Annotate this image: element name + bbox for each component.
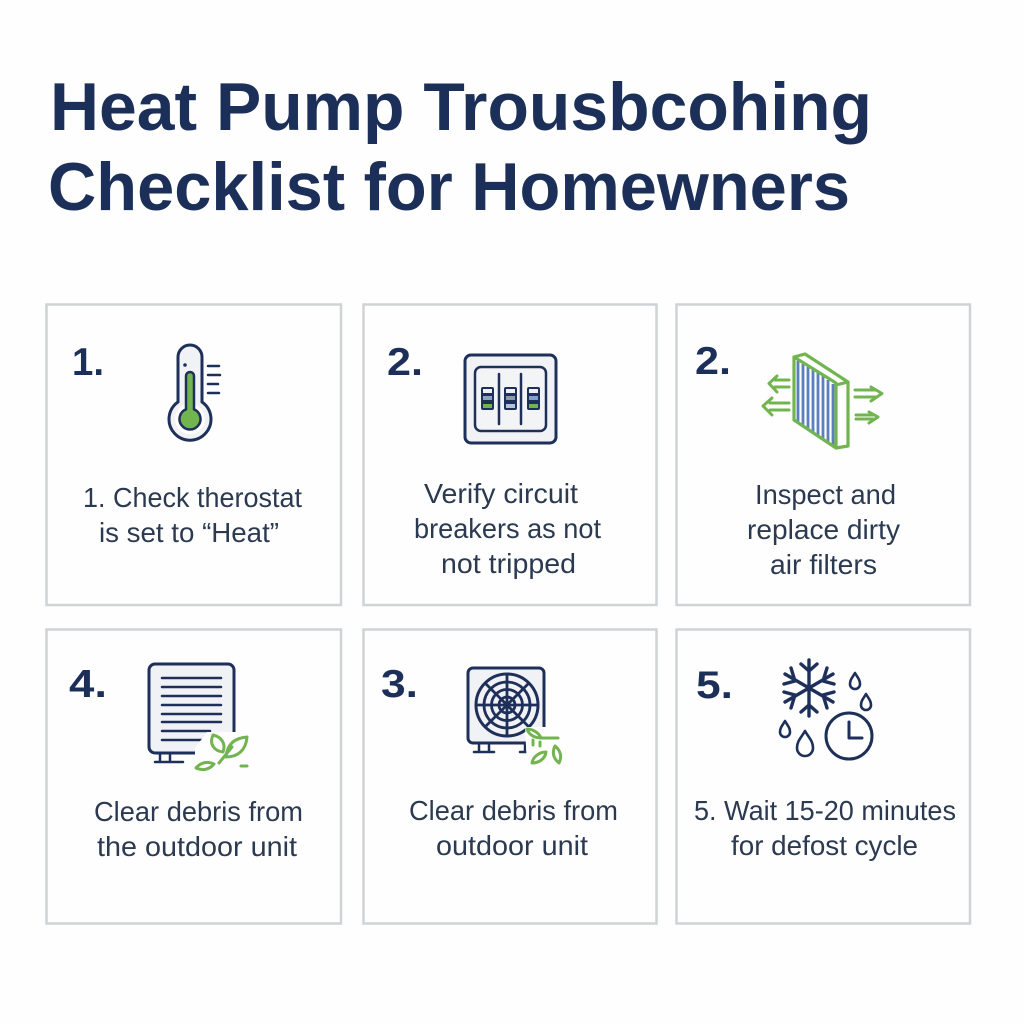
panel: defrost cycle [676,630,970,924]
step text [414,478,601,579]
icon: thermometer [169,345,220,440]
step text: 5. Wait 15-20 minutes [694,795,956,826]
title [48,69,872,225]
panel: air filters [676,304,970,605]
panel: check thermostat [46,304,341,605]
step text: for defost cycle [731,830,918,861]
step number 1: 1. [72,341,104,384]
icon: outdoor fan unit with leaves [468,668,563,765]
step text: air filters [770,549,877,580]
step text [83,482,302,548]
step text [94,796,303,862]
step number 2: 2. [695,340,731,383]
step text: is set to “Heat” [99,517,279,548]
step text: breakers as not [414,513,601,544]
step text [747,479,900,580]
step text: Clear debris from [94,796,303,827]
step number 2: 2. [387,341,423,384]
step text [694,795,956,861]
step text: 1. Check therostat [83,482,302,513]
icon: louvered unit with leaves [149,664,247,770]
step text: Inspect and [755,479,896,510]
step text: Verify circuit [424,478,578,509]
step number 4: 4. [69,663,107,706]
step number 5: 5. [696,664,733,707]
step text: not tripped [441,548,576,579]
step number 3: 3. [381,663,418,706]
icon: air filter with arrows [763,354,882,448]
title: Heat Pump Trousbcohing [50,69,872,145]
step text: Clear debris from [409,795,618,826]
panel: circuit breakers [364,304,656,605]
step text: the outdoor unit [97,831,297,862]
step text: replace dirty [747,514,900,545]
icon: breaker box [465,355,556,443]
title: Checklist for Homewners [48,149,850,225]
step text [409,795,618,861]
step text: outdoor unit [436,830,588,861]
panel: clear debris, outdoor unit [364,630,656,924]
icon: snowflake, droplets and clock [780,660,872,759]
panel: clear debris, indoor-style unit [46,630,341,924]
